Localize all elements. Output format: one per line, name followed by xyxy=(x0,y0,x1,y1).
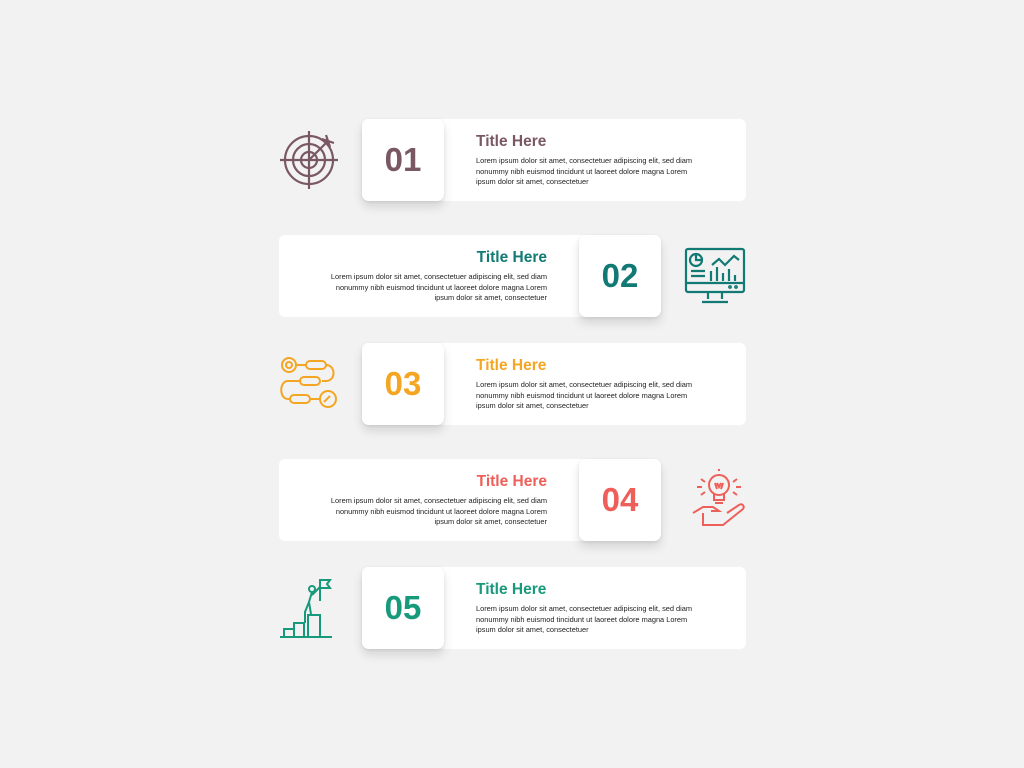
text 2: Lorem ipsum dolor sit amet, consectetuer adipiscing elit, sed diam xyxy=(331,272,547,281)
text 1 xyxy=(476,156,692,186)
panel: card 4 xyxy=(279,459,661,541)
text 1: ipsum dolor sit amet, consectetuer xyxy=(476,177,589,186)
title 3: Title Here xyxy=(476,357,546,374)
panel: card 5 xyxy=(362,567,746,649)
text 3: nonummy nibh euismod tincidunt ut laoreet dolore magna Lorem xyxy=(476,390,687,400)
title 5: Title Here xyxy=(476,581,546,598)
row 2 xyxy=(279,235,746,326)
text 4 xyxy=(331,496,547,526)
panel: card 2 xyxy=(279,235,661,317)
number box 04: 04 xyxy=(602,481,638,518)
text 2: ipsum dolor sit amet, consectetuer xyxy=(434,293,547,302)
text 5: ipsum dolor sit amet, consectetuer xyxy=(476,625,589,634)
icon: target xyxy=(280,131,338,189)
text 2: nonummy nibh euismod tincidunt ut laoreet dolore magna Lorem xyxy=(336,282,547,292)
text 5 xyxy=(476,604,692,634)
icon: monitor chart xyxy=(684,248,746,304)
number box 01: 01 xyxy=(385,141,421,178)
text 4: nonummy nibh euismod tincidunt ut laoreet dolore magna Lorem xyxy=(336,506,547,516)
number box 03 xyxy=(362,343,444,425)
text 5: Lorem ipsum dolor sit amet, consectetuer adipiscing elit, sed diam xyxy=(476,604,692,613)
row 5 xyxy=(280,567,746,658)
text 3: Lorem ipsum dolor sit amet, consectetuer adipiscing elit, sed diam xyxy=(476,380,692,389)
number box 02: 02 xyxy=(602,257,638,294)
text 4: Lorem ipsum dolor sit amet, consectetuer adipiscing elit, sed diam xyxy=(331,496,547,505)
title 1: Title Here xyxy=(476,133,546,150)
text 5: nonummy nibh euismod tincidunt ut laoreet dolore magna Lorem xyxy=(476,614,687,624)
text 2 xyxy=(331,272,547,302)
title 4: Title Here xyxy=(477,473,547,490)
text 4: ipsum dolor sit amet, consectetuer xyxy=(434,517,547,526)
icon: process flow xyxy=(280,357,337,408)
number box 04 xyxy=(579,459,661,541)
row 1 xyxy=(280,119,746,210)
text 3: ipsum dolor sit amet, consectetuer xyxy=(476,401,589,410)
number box 02 xyxy=(579,235,661,317)
number box 03: 03 xyxy=(385,365,421,402)
number box 05: 05 xyxy=(385,589,421,626)
number box 05 xyxy=(362,567,444,649)
icon: bulb in hand xyxy=(692,469,745,526)
number box 01 xyxy=(362,119,444,201)
panel: card 3 xyxy=(362,343,746,425)
text 1: Lorem ipsum dolor sit amet, consectetuer adipiscing elit, sed diam xyxy=(476,156,692,165)
icon: climber with flag xyxy=(280,579,332,638)
text 1: nonummy nibh euismod tincidunt ut laoreet dolore magna Lorem xyxy=(476,166,687,176)
row 4 xyxy=(279,459,745,550)
title 2: Title Here xyxy=(477,249,547,266)
row 3 xyxy=(280,343,746,434)
text 3 xyxy=(476,380,692,410)
panel: card 1 xyxy=(362,119,746,201)
